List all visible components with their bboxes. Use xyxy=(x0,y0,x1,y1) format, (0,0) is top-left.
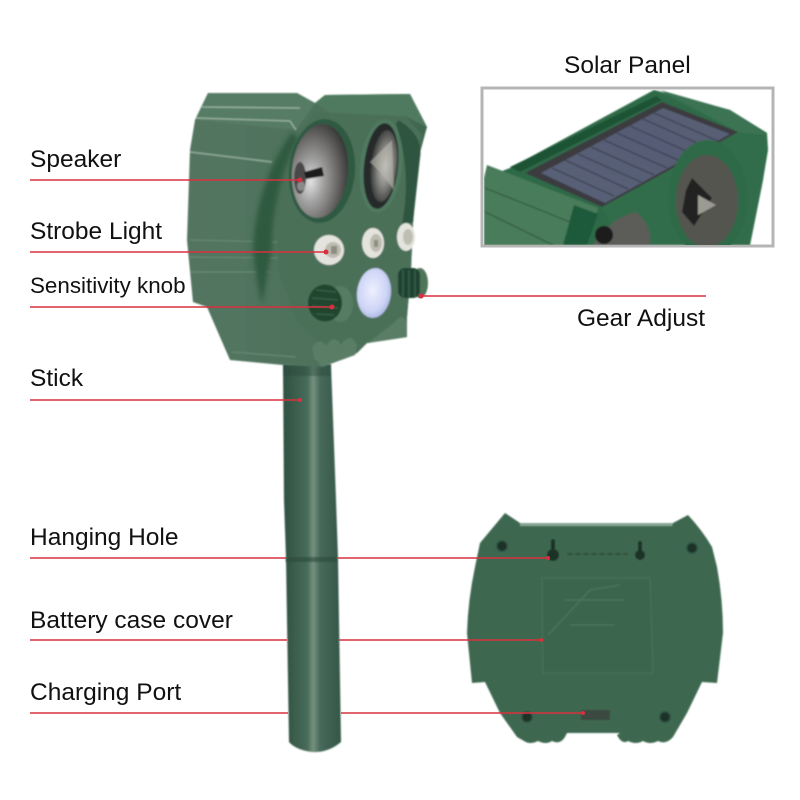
stick xyxy=(283,364,341,752)
sensitivity knob xyxy=(308,284,353,322)
inset front-left block xyxy=(484,165,598,245)
speaker: right xyxy=(355,117,407,215)
inset speakers xyxy=(593,212,650,245)
label: Charging Port: Charging Port xyxy=(30,679,181,706)
label: Gear Adjust: Gear Adjust xyxy=(577,305,705,332)
label: Hanging Hole: Hanging Hole xyxy=(30,524,178,551)
label: Battery case cover: Battery case cover xyxy=(30,607,233,634)
right speaker hood xyxy=(396,120,421,225)
label: Solar Panel: Solar Panel xyxy=(564,52,691,79)
speaker: left xyxy=(285,116,359,226)
charging port xyxy=(581,710,610,720)
crescent shadow xyxy=(253,132,298,305)
label: Strobe Light: Strobe Light xyxy=(30,218,162,245)
front device body xyxy=(187,93,428,367)
red leader lines xyxy=(30,180,706,713)
label: Sensitivity knob: Sensitivity knob xyxy=(30,273,186,298)
owl feet xyxy=(312,338,357,367)
inset body xyxy=(484,90,768,245)
inset solar panel xyxy=(525,102,738,207)
hanging holes xyxy=(547,539,645,561)
label: Stick: Stick xyxy=(30,365,84,392)
face plate xyxy=(276,112,422,353)
battery case cover xyxy=(542,578,653,673)
leader line end dots xyxy=(298,178,585,715)
strobe lights xyxy=(314,223,415,265)
back view device xyxy=(467,513,723,743)
screw holes xyxy=(496,540,698,722)
motion sensor xyxy=(354,266,394,320)
label: Speaker: Speaker xyxy=(30,146,121,173)
gear adjust knob xyxy=(398,268,428,298)
inset: solar panel frame xyxy=(482,88,773,256)
